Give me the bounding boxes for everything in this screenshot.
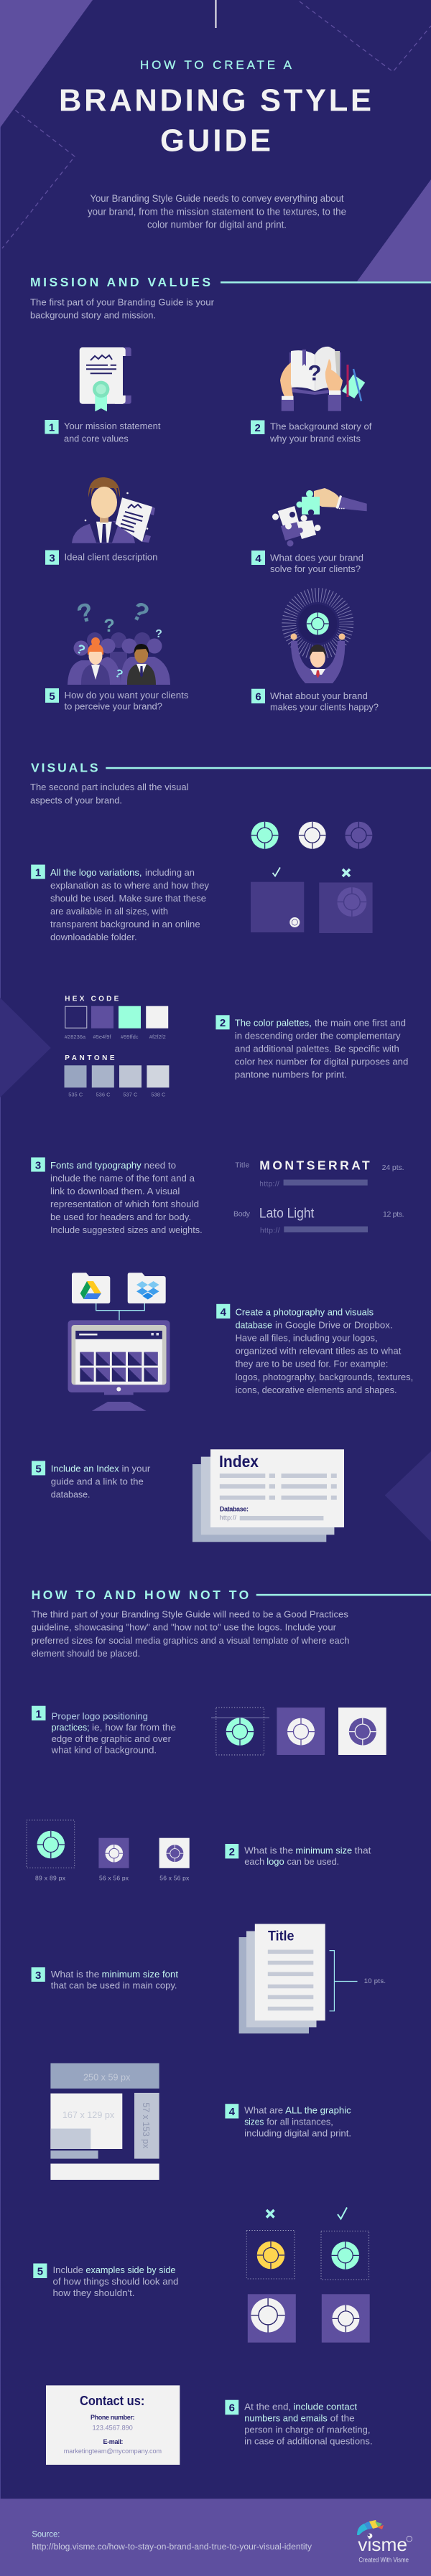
color palette: hex code: #5e4f9f xyxy=(93,1034,111,1040)
text: logo positioning: practices; xyxy=(52,1722,90,1733)
badge and text: item 1: 1 xyxy=(49,422,55,434)
text: graphic sizes: 4 xyxy=(229,2106,236,2118)
text: fonts and typography: link to download them. A visual xyxy=(50,1186,180,1196)
badge and text: item 1 xyxy=(45,420,161,444)
text: minimum font size: that can be used in main copy. xyxy=(51,1980,177,1991)
text: fonts and typography: representation of which font should xyxy=(50,1199,199,1209)
icon: crowd with question marks: ? xyxy=(155,628,162,640)
color palette: pantone xyxy=(65,1054,169,1098)
badge and text: item 5: 5 xyxy=(49,690,55,703)
text: minimum logo size: that xyxy=(355,1845,371,1856)
typography specimen xyxy=(233,1158,404,1235)
intro text: Your Branding Style Guide needs to convey everything about xyxy=(91,193,344,204)
badge and text: item 2: why your brand exists xyxy=(269,434,361,444)
text: contact details: numbers and emails xyxy=(244,2413,328,2423)
section heading: mission and values: MISSION AND VALUES xyxy=(30,275,210,289)
text: color palettes: the main one first and xyxy=(315,1018,406,1029)
text: minimum logo size: can be used. xyxy=(287,1856,339,1867)
logo variations xyxy=(251,822,372,849)
text: fonts and typography: Fonts and typography xyxy=(50,1160,142,1171)
text: logo variations: downloadable folder. xyxy=(50,932,137,942)
icon: certificate scroll xyxy=(80,347,131,411)
text: minimum logo size: minimum size xyxy=(295,1845,352,1856)
section intro: how to: preferred sizes for social media graphics and a visual template of where each xyxy=(32,1635,349,1646)
contact card: E-mail: xyxy=(103,2438,123,2445)
text: graphic sizes: What are xyxy=(244,2105,283,2116)
illustration: graphic sizes: 167 x 129 px xyxy=(62,2109,115,2120)
illustration: folders and monitor database xyxy=(68,1273,170,1411)
text: photography database xyxy=(216,1304,413,1395)
badge and text: item 2: The background story of xyxy=(270,421,372,432)
badge and text: item 3: Ideal client description xyxy=(65,552,158,563)
decoration: top-left triangle xyxy=(0,0,93,128)
color palette: hex code: #28236a xyxy=(65,1034,86,1040)
text: fonts and typography: 3 xyxy=(35,1160,41,1171)
icon: crowd with question marks: ? xyxy=(127,595,154,629)
text: examples side by side xyxy=(33,2264,178,2298)
text: graphic sizes: for all instances, xyxy=(267,2116,333,2127)
title: BRANDING STYLE xyxy=(59,84,371,118)
icon: crowd with question marks: ? xyxy=(113,668,124,681)
visme logo xyxy=(357,2520,412,2564)
text: fonts and typography: be used for headers and for body. xyxy=(50,1212,191,1222)
text: contact details: At the end, xyxy=(244,2401,291,2412)
text: color palettes: and additional palettes. Be specific with xyxy=(235,1044,399,1054)
decoration: right triangle xyxy=(357,179,431,281)
source: http://blog.visme.co/how-to-stay-on-brand-and-true-to-your-visual-identity xyxy=(32,2543,312,2552)
color palette: pantone: 536 C xyxy=(96,1092,111,1098)
typography specimen: http:// xyxy=(259,1180,279,1188)
visme logo: Created With Visme xyxy=(358,2557,409,2564)
color palette: pantone: 537 C xyxy=(123,1092,138,1098)
contact card: 123.4567.890 xyxy=(93,2424,133,2431)
text: logo positioning: what kind of background. xyxy=(51,1744,157,1756)
typography specimen: Title xyxy=(235,1161,250,1169)
text: logo variations: should be used. Make sure that these xyxy=(50,893,206,904)
text: minimum font size xyxy=(32,1967,178,1991)
color palette: hex code xyxy=(65,995,168,1040)
contact card xyxy=(46,2385,180,2465)
typography specimen: MONTSERRAT xyxy=(259,1158,370,1172)
color palette: pantone: PANTONE xyxy=(65,1054,115,1062)
text: fonts and typography: include the name of the font and a xyxy=(50,1173,195,1184)
section heading: how to and how not to: HOW TO AND HOW NOT TO xyxy=(32,1588,249,1602)
text: graphic sizes: sizes xyxy=(244,2116,264,2127)
illustration: graphic sizes: 57 x 153 px xyxy=(141,2102,152,2149)
color palette: pantone: 535 C xyxy=(68,1092,83,1098)
text: logo variations: including an xyxy=(145,867,195,878)
decoration: left triangle xyxy=(0,998,51,1097)
text: photography database: database xyxy=(236,1319,272,1331)
text: graphic sizes: including digital and print. xyxy=(244,2127,351,2138)
badge and text: item 3: 3 xyxy=(49,553,55,564)
text: contact details xyxy=(225,2400,373,2447)
text: photography database: in Google Drive or Dropbox. xyxy=(275,1319,392,1331)
text: color palettes xyxy=(216,1015,408,1080)
badge and text: item 4: 4 xyxy=(255,553,261,565)
text: minimum logo size xyxy=(225,1844,371,1867)
text: logo variations xyxy=(31,865,209,942)
typography specimen: Body xyxy=(233,1209,251,1218)
icon: crowd with question marks xyxy=(68,595,170,685)
color palette: pantone: 538 C xyxy=(151,1092,166,1098)
minimum logo sizes: 56 x 56 px xyxy=(99,1875,129,1882)
badge and text: item 5: How do you want your clients xyxy=(65,690,189,701)
color palette: hex code: HEX CODE xyxy=(65,995,119,1003)
text: logo variations: All the logo variations, xyxy=(50,867,142,878)
text: photography database: organized with relevant titles as to what xyxy=(236,1346,402,1357)
text: index: Include an Index xyxy=(51,1463,119,1474)
text: contact details: person in charge of marketing, xyxy=(244,2425,371,2435)
text: logo positioning: 1 xyxy=(36,1708,42,1720)
text: minimum logo size: 2 xyxy=(229,1846,235,1858)
badge and text: item 1: and core values xyxy=(64,433,129,444)
text: examples side by side: examples side by side xyxy=(85,2264,175,2275)
badge and text: item 3 xyxy=(45,550,158,565)
illustration: index pages: Index xyxy=(219,1452,259,1471)
text: color palettes: color hex number for digital purposes and xyxy=(235,1057,408,1067)
top vertical line xyxy=(216,0,217,28)
section intro: how to xyxy=(32,1609,349,1659)
typography specimen: 12 pts. xyxy=(383,1210,404,1219)
icon: happy person holding logo with rays xyxy=(289,595,346,683)
badge and text: item 6: makes your clients happy? xyxy=(270,701,379,712)
text: logo variations: are available in all sizes, with xyxy=(50,906,168,917)
text: logo variations: explanation as to where and how they xyxy=(50,880,209,891)
text: logo positioning xyxy=(32,1706,176,1756)
decoration: dashed line top right xyxy=(300,1,431,72)
illustration: index pages: Database: xyxy=(220,1505,249,1512)
section intro: how to: The third part of your Branding Style Guide will need to be a Good Practices xyxy=(32,1609,348,1619)
text: color palettes: pantone numbers for print. xyxy=(235,1069,347,1080)
text: index: in your xyxy=(122,1463,151,1474)
typography specimen: Lato Light xyxy=(259,1206,315,1221)
badge and text: item 2: 2 xyxy=(255,422,261,434)
minimum logo sizes xyxy=(27,1820,190,1882)
text: contact details: include contact xyxy=(293,2401,357,2412)
footer xyxy=(0,2498,431,2576)
contact card: Phone number: xyxy=(91,2414,135,2421)
section intro: how to: element should be placed. xyxy=(32,1648,140,1659)
badge and text: item 4: solve for your clients? xyxy=(270,563,361,574)
text: photography database: logos, photography, backgrounds, textures, xyxy=(236,1372,413,1382)
text: logo positioning: Proper logo positioning xyxy=(52,1710,148,1721)
typography specimen: 24 pts. xyxy=(382,1163,404,1172)
illustration: index pages xyxy=(193,1449,344,1542)
source: Source: xyxy=(32,2531,60,2539)
badge and text: item 5: to perceive your brand? xyxy=(65,701,162,711)
section intro: mission xyxy=(30,297,215,320)
badge and text: item 4: What does your brand xyxy=(270,552,363,563)
badge and text: item 4 xyxy=(251,551,363,574)
text: logo variations: transparent background in an online xyxy=(50,919,200,929)
icon: open book with question mark: ? xyxy=(308,360,321,385)
section intro: visuals xyxy=(30,782,189,805)
section intro: visuals: The second part includes all the visual xyxy=(30,782,189,792)
icon: crowd with question marks: ? xyxy=(103,616,115,636)
icon: ideal client man with document xyxy=(72,477,155,543)
typography specimen: http:// xyxy=(260,1227,280,1235)
decoration: dashed line left xyxy=(2,100,75,248)
text: color palettes: in descending order the complementary xyxy=(235,1031,401,1041)
section intro: mission: background story and mission. xyxy=(30,310,156,320)
illustration: title pages with size bracket: 10 pts. xyxy=(364,1977,386,1985)
contact card: Contact us: xyxy=(80,2394,144,2408)
section intro: mission: The first part of your Branding Guide is your xyxy=(30,297,215,307)
icon: crowd with question marks: ? xyxy=(74,642,88,657)
illustration: index pages: http:// xyxy=(220,1514,236,1522)
text: photography database: 4 xyxy=(221,1306,227,1319)
text: contact details: of the xyxy=(330,2413,355,2423)
badge and text: item 6: 6 xyxy=(255,690,261,703)
text: graphic sizes: ALL the graphic xyxy=(285,2105,351,2116)
color palette: hex code: #f2f2f2 xyxy=(149,1034,166,1040)
text: index: database. xyxy=(51,1489,91,1500)
intro text xyxy=(88,193,346,230)
text: logo positioning: ie, how far from the xyxy=(92,1722,176,1733)
text: examples side by side: of how things should look and xyxy=(53,2276,178,2287)
text: color palettes: 2 xyxy=(220,1017,226,1029)
text: minimum logo size: each xyxy=(244,1856,264,1867)
source xyxy=(32,2531,312,2552)
section intro: how to: guideline, showcasing "how" and "how not to" use the logos. Include your xyxy=(32,1622,337,1633)
text: index xyxy=(32,1461,151,1500)
section intro: visuals: aspects of your brand. xyxy=(30,795,122,805)
text: minimum font size: What is the xyxy=(51,1969,99,1980)
section heading: visuals: VISUALS xyxy=(31,761,98,775)
badge and text: item 6: What about your brand xyxy=(270,690,368,701)
minimum logo sizes: 56 x 56 px xyxy=(159,1875,190,1882)
illustration: graphic sizes: 250 x 59 px xyxy=(83,2071,131,2082)
icon: crowd with question marks: ? xyxy=(73,596,96,629)
text: fonts and typography: need to xyxy=(144,1160,176,1171)
minimum logo sizes: 89 x 89 px xyxy=(35,1875,66,1882)
text: minimum logo size: logo xyxy=(267,1856,284,1867)
icon: puzzle pieces and hand xyxy=(272,488,367,547)
visme logo: visme xyxy=(358,2534,407,2555)
text: examples side by side: Include xyxy=(53,2264,83,2275)
text: photography database: Create a photography and visuals xyxy=(236,1306,374,1318)
logo usage: correct and wrong placement xyxy=(251,867,373,933)
title xyxy=(59,58,371,158)
badge and text: item 6 xyxy=(251,689,379,712)
intro text: your brand, from the mission statement to the textures, to the xyxy=(88,207,346,217)
text: contact details: in case of additional questions. xyxy=(244,2436,373,2447)
illustration: title pages with size bracket: Title xyxy=(268,1929,295,1944)
text: logo positioning: edge of the graphic and over xyxy=(52,1733,172,1744)
badge and text: item 5 xyxy=(45,688,189,711)
text: examples side by side: 5 xyxy=(37,2265,43,2278)
text: photography database: icons, decorative elements and shapes. xyxy=(236,1385,397,1395)
title: GUIDE xyxy=(160,123,271,158)
text: fonts and typography xyxy=(31,1157,203,1235)
illustration: title pages with size bracket xyxy=(239,1924,386,2033)
text: index: 5 xyxy=(35,1463,42,1475)
contact card: marketingteam@mycompany.com xyxy=(64,2448,162,2455)
intro text: color number for digital and print. xyxy=(147,220,287,230)
side by side logo comparison xyxy=(246,2208,370,2343)
text: examples side by side: how they shouldn't. xyxy=(53,2287,135,2298)
illustration: graphic sizes xyxy=(50,2063,159,2180)
text: color palettes: The color palettes, xyxy=(235,1018,312,1029)
text: logo variations: 1 xyxy=(35,867,41,879)
text: index: guide and a link to the xyxy=(51,1476,144,1487)
badge and text: item 1: Your mission statement xyxy=(64,421,161,431)
color palette: hex code: #99ffdc xyxy=(121,1034,139,1040)
decoration: right triangle xyxy=(385,1451,431,1542)
title: HOW TO CREATE A xyxy=(140,58,292,72)
text: contact details: 6 xyxy=(229,2402,235,2415)
text: minimum font size: minimum size font xyxy=(102,1969,178,1980)
badge and text: item 2 xyxy=(251,421,372,444)
text: photography database: they are to be used for. For example: xyxy=(236,1359,388,1369)
text: graphic sizes xyxy=(225,2104,351,2138)
text: minimum font size: 3 xyxy=(35,1970,41,1982)
text: minimum logo size: What is the xyxy=(244,1845,293,1856)
logo positioning examples xyxy=(211,1708,386,1755)
icon: open book with question mark xyxy=(280,347,365,411)
text: fonts and typography: Include suggested sizes and weights. xyxy=(50,1224,203,1235)
text: photography database: Have all files, including your logos, xyxy=(236,1332,378,1344)
